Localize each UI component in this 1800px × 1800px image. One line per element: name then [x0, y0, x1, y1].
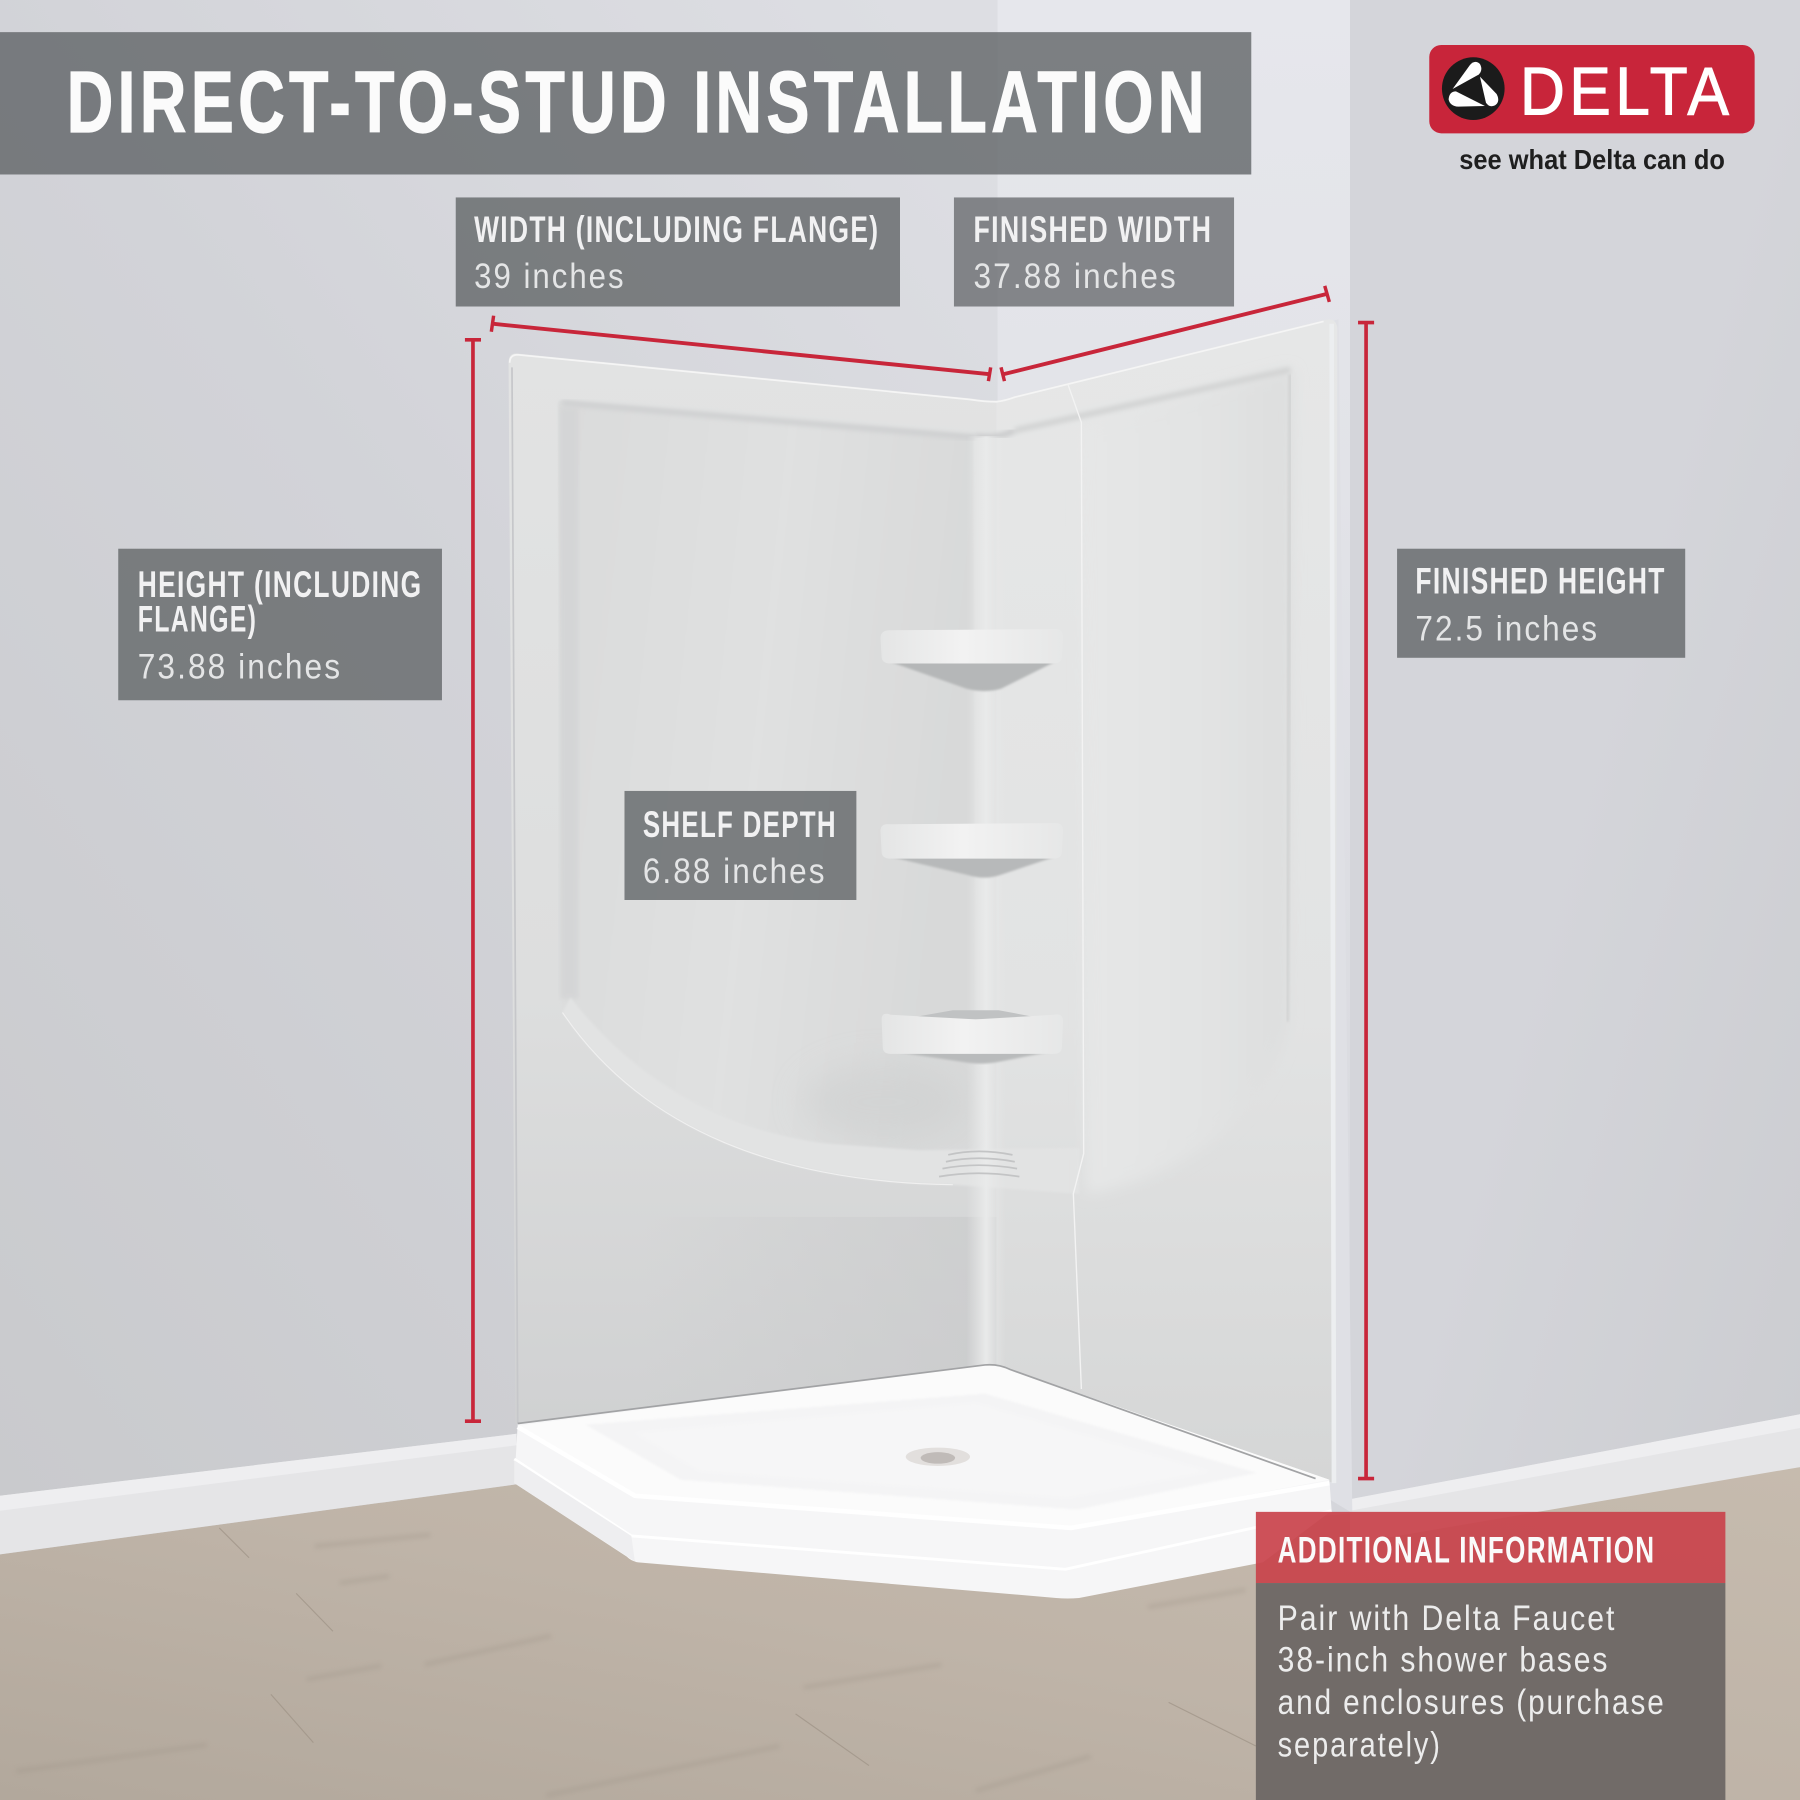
icon: triangle mark: [1442, 57, 1505, 120]
panel: right wall: [996, 319, 1337, 1483]
panel: left recess top shadow: [562, 403, 976, 437]
callout: height including flange: HEIGHT (INCLUDING: [138, 564, 422, 605]
panel: ridges: [939, 1151, 1019, 1177]
tray: front outer skirt: [514, 1365, 1332, 1599]
panel: lower curved lip: [562, 998, 1079, 1194]
callout: height including flange: [118, 549, 442, 700]
logo: red badge: [1429, 45, 1755, 133]
heading: additional information: [1256, 1512, 1725, 1583]
title banner: [0, 32, 1251, 174]
text block: additional information body: 38-inch shower bases: [1278, 1639, 1609, 1679]
tray: drain: [906, 1448, 970, 1466]
tray: back edge shadow: [518, 1365, 1316, 1479]
dimension arrow: finished height: [1358, 323, 1374, 1479]
tray: upper deck: [518, 1365, 1329, 1528]
panel: corner column: [967, 436, 1006, 1372]
tray: basin: [585, 1394, 1257, 1510]
panel: center seam: [1068, 383, 1084, 1389]
text block: additional information body: separately): [1278, 1724, 1442, 1764]
logo: Delta: [1429, 45, 1755, 175]
logo: wordmark: DELTA: [1520, 54, 1733, 129]
shower wall panels: [509, 319, 1352, 1513]
dimension arrow: finished width: [1001, 286, 1329, 381]
panel: soft lower shading: [643, 1217, 996, 1412]
shower base tray: [514, 1365, 1332, 1599]
logo: tagline: see what Delta can do: [1459, 144, 1725, 175]
callout: width including flange: [456, 197, 900, 307]
text block: additional information body: [1256, 1583, 1725, 1800]
panel edge highlights: [510, 321, 1334, 1483]
callout: shelf depth: [624, 791, 856, 900]
callout: finished width: 37.88 inches: [973, 256, 1178, 296]
title banner: DIRECT-TO-STUD INSTALLATION: [67, 54, 1209, 151]
text block: additional information body: Pair with Delta Faucet: [1278, 1598, 1616, 1638]
panel: left recess: [558, 400, 976, 1148]
tray: front facet shading: [514, 1460, 635, 1561]
callout: width including flange: 39 inches: [474, 256, 626, 296]
callout: shelf depth: SHELF DEPTH: [643, 804, 837, 845]
callout: finished height: [1397, 549, 1685, 658]
callout: finished height: 72.5 inches: [1415, 609, 1599, 649]
shelf 1: [880, 629, 1063, 691]
baseboard left: [0, 1434, 517, 1554]
panel: curved lip highlight: [562, 1012, 953, 1185]
room background: wood floor: [0, 1467, 1800, 1800]
dimension arrow: height including flange: [465, 340, 481, 1421]
callout: shelf depth: 6.88 inches: [643, 851, 827, 891]
callout: finished height: FINISHED HEIGHT: [1415, 560, 1666, 601]
callout: height including flange: FLANGE): [138, 598, 257, 639]
tray: basin floor: [634, 1403, 1211, 1498]
tray: upper lip highlight: [518, 1427, 1329, 1528]
tray: step highlight: [514, 1459, 1332, 1569]
callout: height including flange: 73.88 inches: [138, 646, 342, 686]
panel: recess bottom shading: [804, 1063, 964, 1141]
panel: top corner shadow: [976, 430, 1015, 437]
panel: right recess side shadow: [1287, 374, 1290, 1022]
shelf 2: [880, 823, 1063, 878]
dimension arrow: width including flange: [491, 316, 991, 381]
callout: finished width: [954, 197, 1234, 307]
panel: right recess: [1081, 370, 1293, 1194]
panel: left wall: [509, 353, 996, 1423]
shelf 3: [882, 1010, 1063, 1064]
callout: finished width: FINISHED WIDTH: [973, 209, 1212, 250]
callout: width including flange: WIDTH (INCLUDING FLANGE): [474, 209, 879, 250]
panel: right recess top shadow: [1015, 370, 1290, 430]
panel: additional information: [1256, 1512, 1725, 1800]
panel: left recess side shadow: [560, 408, 579, 999]
text block: additional information body: and enclosures (purchase: [1278, 1682, 1666, 1722]
panel: outer flange side edge: [1318, 319, 1352, 1513]
baseboard right: [1350, 1414, 1800, 1544]
heading: additional information: ADDITIONAL INFORMATION: [1278, 1529, 1655, 1570]
